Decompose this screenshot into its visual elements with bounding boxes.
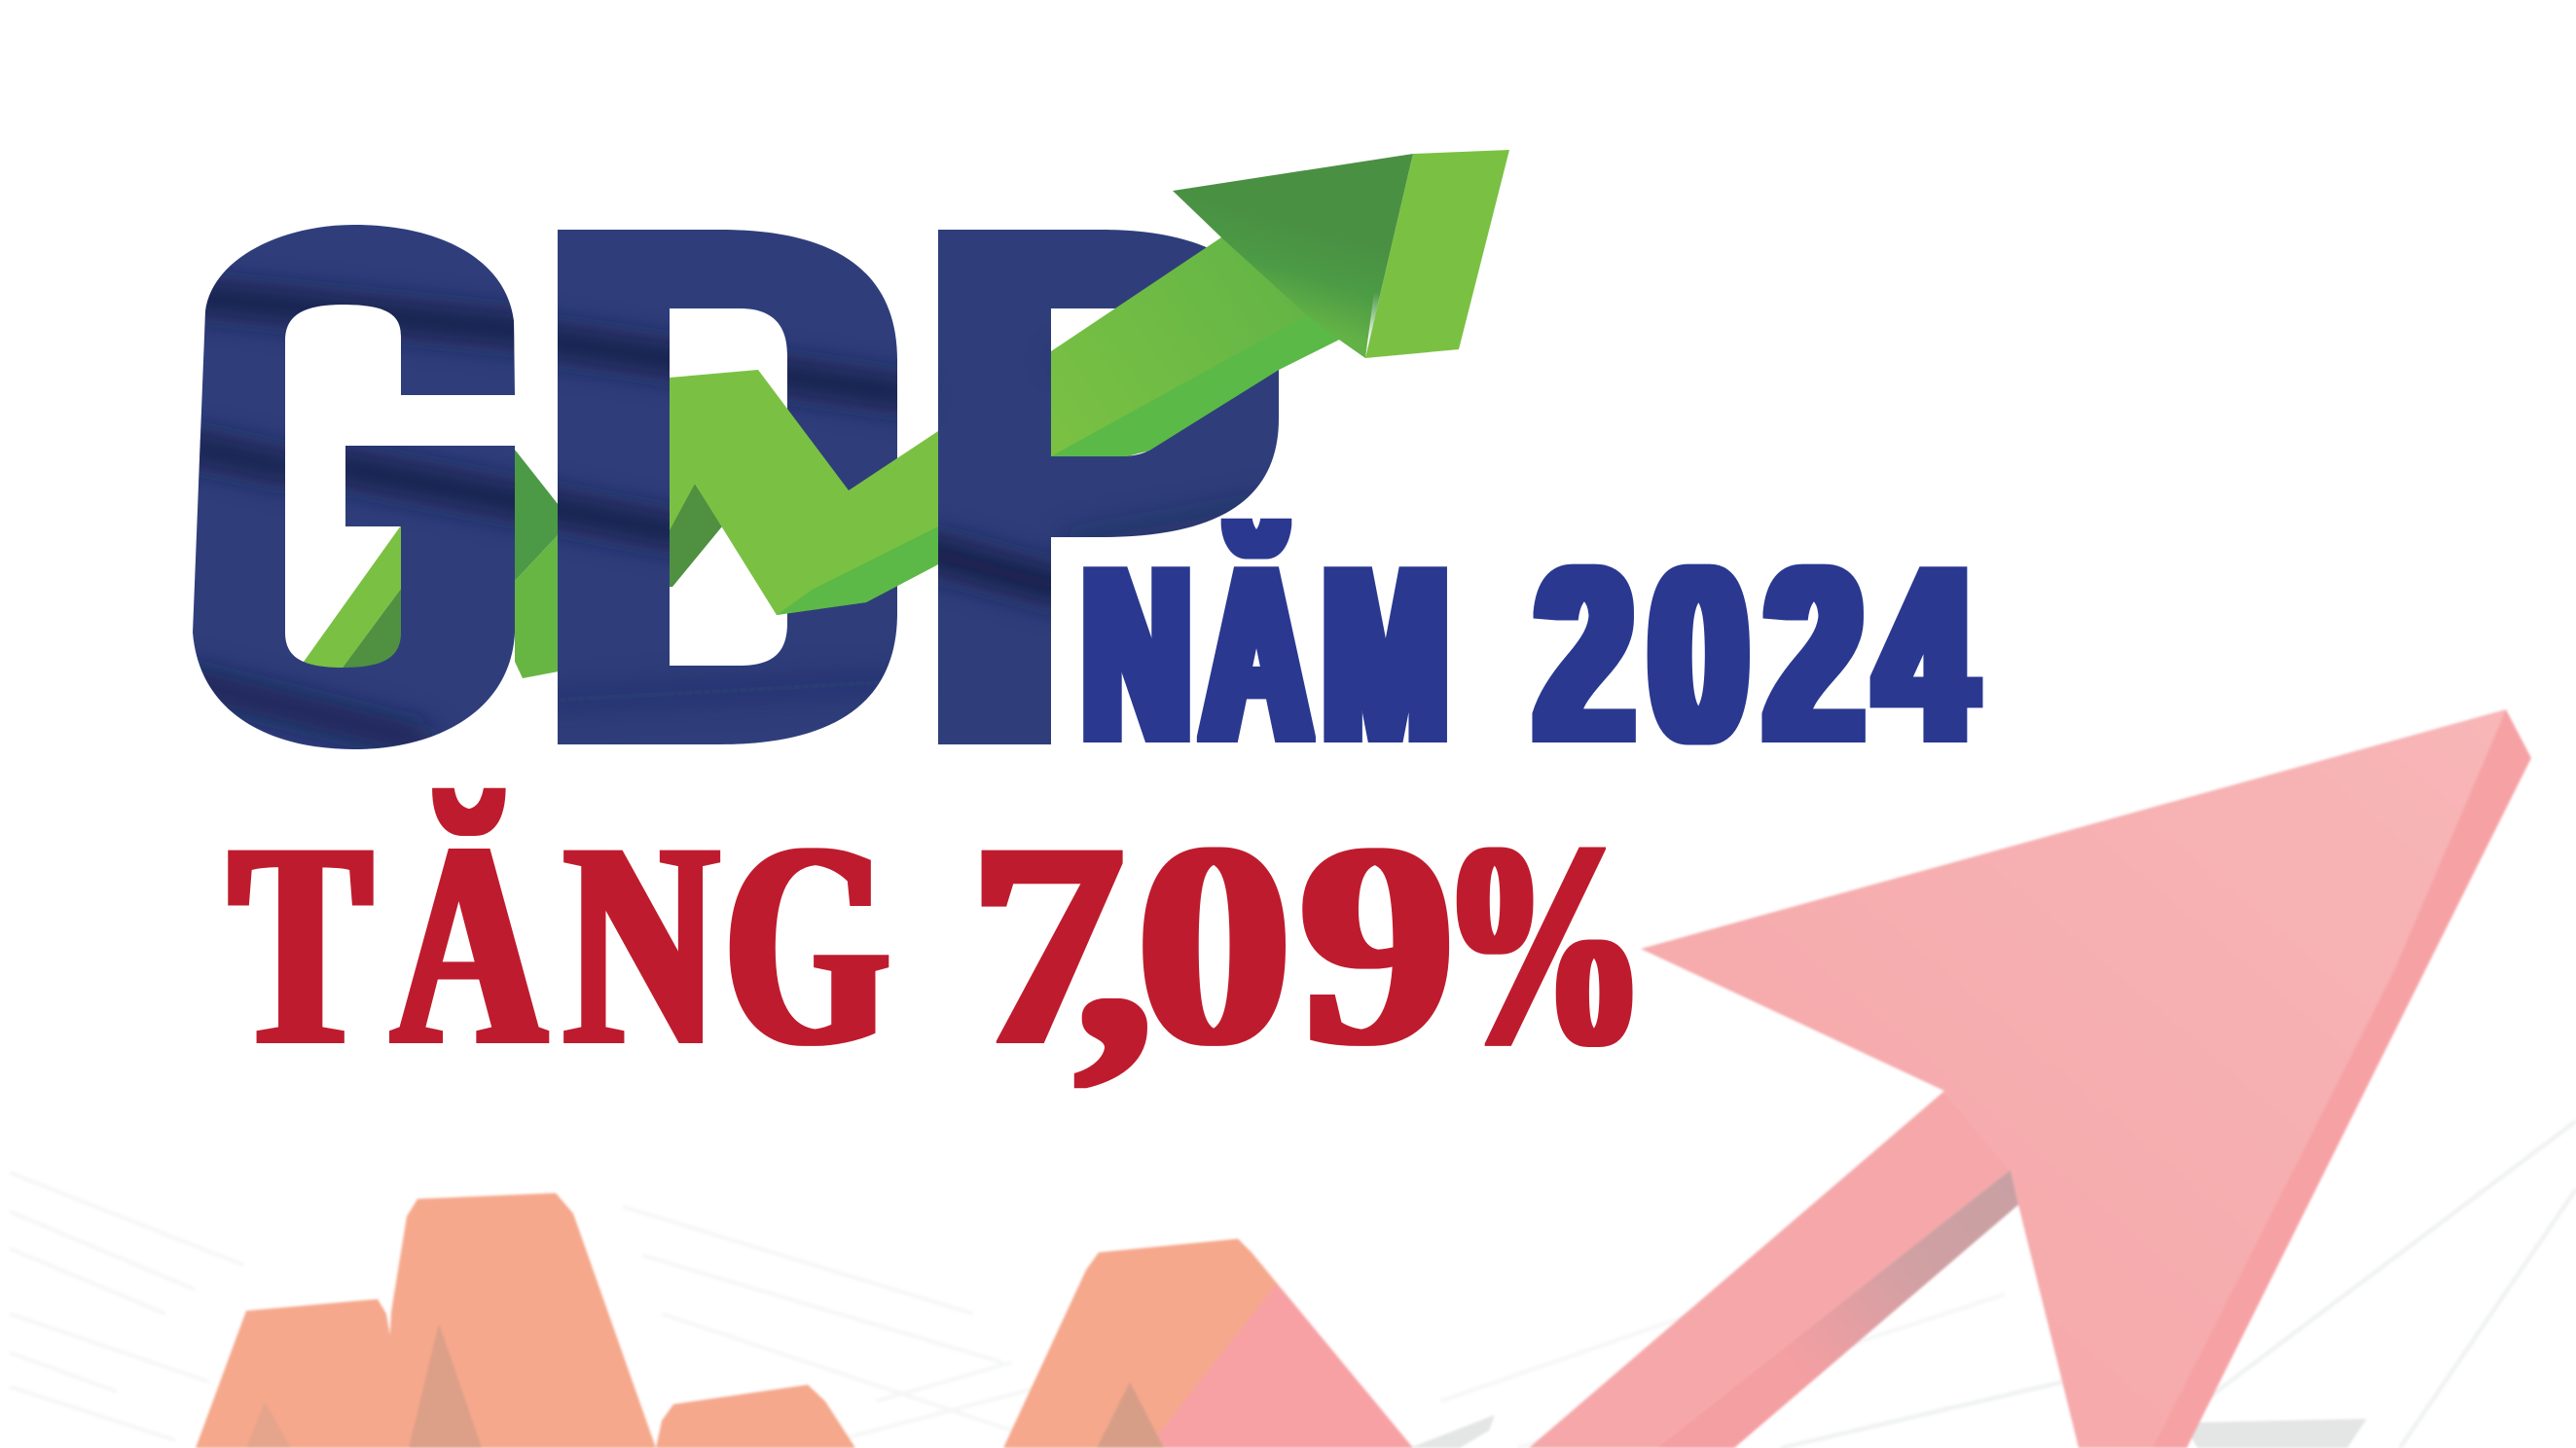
background rising chart: orange peaks [196, 1193, 1413, 1448]
grey chart shadows [1409, 1415, 2367, 1448]
peak 1 [196, 1299, 409, 1448]
peak 3 [656, 1385, 855, 1448]
headline: TĂNG 7,09%: TĂNG [231, 782, 889, 1105]
arrow head side [1365, 150, 1509, 358]
letter G [175, 204, 1304, 769]
D stem [558, 504, 559, 671]
headline: TĂNG 7,09% [231, 782, 1646, 1106]
headline: TĂNG 7,09%: % [1441, 783, 1646, 1106]
arrow head front [1173, 154, 1413, 358]
middle zigzag [670, 370, 938, 615]
peak shadows [409, 1323, 482, 1448]
headline: TĂNG 7,09%: 7,09 [969, 782, 1455, 1105]
GDP logo [175, 150, 1509, 769]
letter D [670, 230, 897, 744]
heading: NĂM 2024: 2024 [1537, 517, 1973, 793]
letter P [1051, 230, 1279, 537]
arrow shaft [1529, 1091, 2011, 1448]
peak 4 [1003, 1239, 1413, 1448]
upper shaft [1051, 234, 1382, 456]
peak 2 [383, 1193, 656, 1448]
P stem [175, 204, 1304, 769]
pink overlap [1147, 1284, 1413, 1448]
arrow head side [2152, 709, 2531, 1448]
arrow head face [1641, 709, 2506, 1448]
faint perspective grid [10, 1121, 2576, 1448]
lower tail [304, 525, 401, 671]
shaft shadow facet [1656, 1170, 2018, 1448]
heading: NĂM 2024 [1083, 517, 1973, 793]
green rising arrow [304, 150, 1509, 678]
heading: NĂM 2024: NĂM [1083, 517, 1447, 793]
large pink arrow [1529, 709, 2531, 1448]
